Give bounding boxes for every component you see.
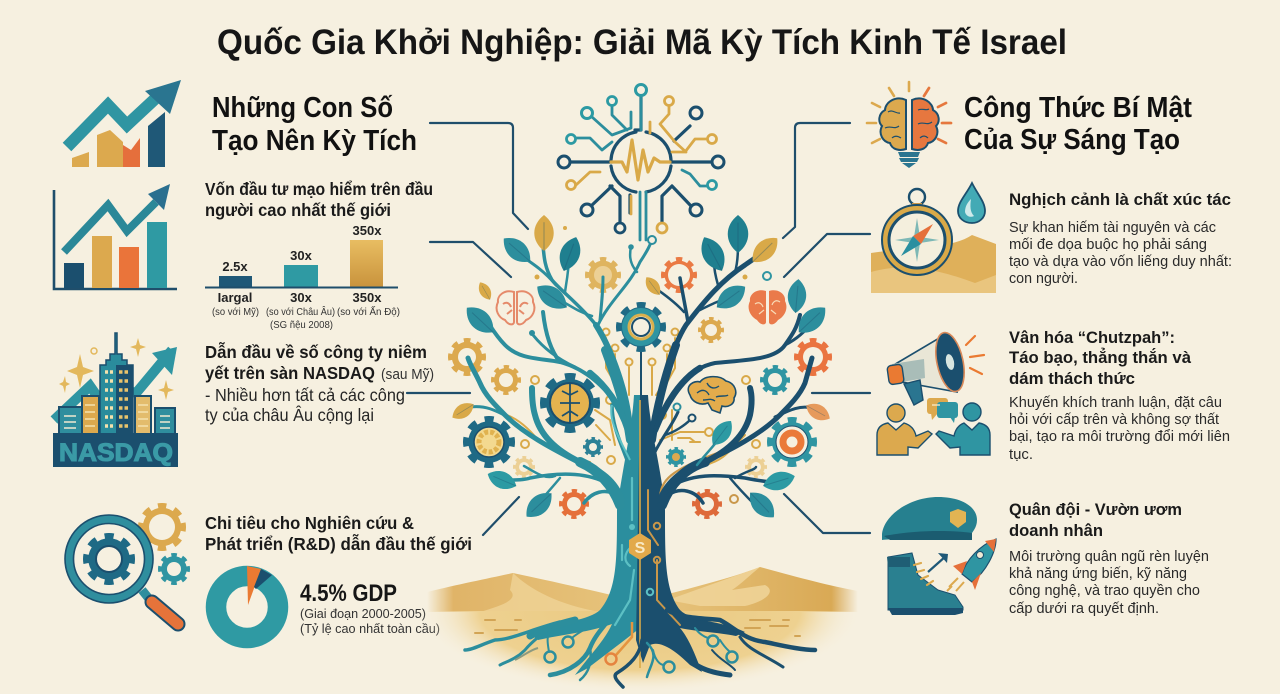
heading: secret formula: Công Thức Bí Mật [964,92,1192,124]
icon: gold brain [688,377,736,413]
text: military incubator: Quân đội - Vườn ươm [1009,500,1182,519]
text: adversity: Nghịch cảnh là chất xúc tác [1009,190,1231,209]
text: military incubator: cấp dưới ra quyết định. [1009,600,1159,617]
icon: rising chart with arrow [67,80,181,167]
icon: coin on trunk [629,533,651,560]
icon: NASDAQ skyline: NASDAQ [59,439,173,467]
stat: 4.5% GDP: 4.5% GDP [300,580,397,607]
text: adversity [1009,190,1232,287]
text: R&D spending: Phát triển (R&D) dẫn đầu thế giới [205,533,472,554]
icon: brain lightbulb [867,82,951,168]
bar chart: venture capital comparison: (SG ñệu 2008) [270,319,333,331]
text: venture capital heading [205,179,433,220]
heading: numbers [212,92,417,157]
text: adversity: tạo và dựa vào vốn liếng duy nhất: [1009,253,1232,270]
title: Quốc Gia Khởi Nghiệp: Giải Mã Kỳ Tích Kinh Tế Israel [217,23,1067,62]
heading: secret formula: Của Sự Sáng Tạo [964,124,1180,156]
stat: 4.5% GDP: (Giai đoạn 2000-2005) [300,606,426,621]
text: venture capital heading: người cao nhất thế giới [205,200,391,220]
icon: megaphone and people [877,330,990,455]
icon: orange brain on tree [749,290,786,324]
branches [468,236,812,505]
circuit traces behind branches [507,328,760,465]
panel: right formula section [867,82,1232,617]
text: chutzpah culture: dám thách thức [1009,369,1135,388]
icon: water drop [958,183,985,223]
icon: compass in desert [871,189,996,293]
text: chutzpah culture: hỏi với cấp trên và không sợ thất [1009,411,1220,428]
text: adversity: Sự khan hiếm tài nguyên và các [1009,219,1216,236]
donut chart: 4.5% GDP [216,566,278,638]
connector: numbers heading to tree [430,123,528,229]
panel: left numbers section [53,80,472,638]
icon: bar chart with arrow [54,184,177,289]
text: NASDAQ listing: - Nhiều hơn tất cả các công [205,385,405,405]
heading: numbers: Tạo Nên Kỳ Tích [212,125,417,157]
text: R&D spending [205,513,472,554]
connector: military to tree [784,494,870,533]
text: chutzpah culture: Táo bạo, thẳng thắn và [1009,348,1192,367]
bar chart: venture capital comparison: (so với Mỹ) [212,306,259,318]
bar chart: venture capital comparison: 30x [290,248,313,263]
desert dunes and ground [422,567,856,686]
stat: 4.5% GDP [300,580,440,636]
text: chutzpah culture: tục. [1009,446,1033,463]
text: chutzpah culture [1009,328,1230,463]
leaves [449,215,833,524]
text: NASDAQ listing: yết trên sàn NASDAQ [205,363,375,383]
text: military incubator: khả năng ứng biến, kỹ năng [1009,565,1187,582]
icon: center gear [615,301,667,395]
roots [465,610,815,687]
icon: beret, boot and rocket [882,497,996,615]
bar chart: venture capital comparison: 350x [353,290,382,305]
connector: NASDAQ to tree [407,392,470,394]
text: adversity: con người. [1009,270,1078,287]
icon: coin on trunk: S [635,540,646,557]
text: chutzpah culture: bại, tạo ra môi trường đổi mới liên [1009,428,1230,445]
bar chart: venture capital comparison [205,223,400,331]
text: adversity: mối đe dọa buộc họ phải sáng [1009,236,1207,253]
text: NASDAQ listing [205,341,434,425]
stat: 4.5% GDP: (Tỷ lệ cao nhất toàn cầu) [300,621,440,636]
bar chart: venture capital comparison: 2.5x [222,259,248,274]
icon: brain in gear [539,372,601,434]
connector: chutzpah to tree [812,392,870,394]
bar chart: venture capital comparison: Iargal [218,290,252,305]
heading: numbers: Những Con Số [212,92,393,124]
icon: outline brain on tree [497,291,534,324]
icon: NASDAQ skyline [53,333,178,467]
text: military incubator: Môi trường quân ngũ rèn luyện [1009,548,1209,565]
text: NASDAQ listing: ty của châu Âu cộng lại [205,405,374,425]
text: venture capital heading: Vốn đầu tư mạo hiểm trên đầu [205,179,433,199]
bar chart: venture capital comparison: (so với Ấn Độ) [337,305,400,318]
text: chutzpah culture: Vân hóa “Chutzpah”: [1009,328,1175,347]
icon: circuit brain pulse [558,84,724,240]
bar chart: venture capital comparison: 30x [290,290,313,305]
gears on the tree [447,256,833,520]
bar chart: venture capital comparison: 350x [353,223,382,238]
illustration: innovation tree [418,84,862,693]
bar chart: venture capital comparison: (so với Châu Âu) [266,305,335,318]
trunk [530,395,745,675]
text: R&D spending: Chi tiêu cho Nghiên cứu & [205,513,414,533]
icon: left dark gear [462,415,516,469]
text: NASDAQ listing: (sau Mỹ) [381,366,434,383]
text: military incubator: doanh nhân [1009,521,1103,540]
connector: venture capital to tree [430,242,511,277]
icon: magnifier with gears [65,502,191,624]
text: NASDAQ listing: Dẫn đầu về số công ty niêm [205,341,427,362]
connector: secret formula to tree [783,123,850,238]
connector: R&D to tree [483,497,519,535]
icon: right teal gear [766,416,818,468]
heading: secret formula [964,92,1192,156]
text: military incubator [1009,500,1209,617]
text: military incubator: công nghệ, và trao quyền cho [1009,582,1200,599]
connector: adversity to tree [784,234,870,277]
text: chutzpah culture: Khuyến khích tranh luận, đặt câu [1009,394,1222,411]
